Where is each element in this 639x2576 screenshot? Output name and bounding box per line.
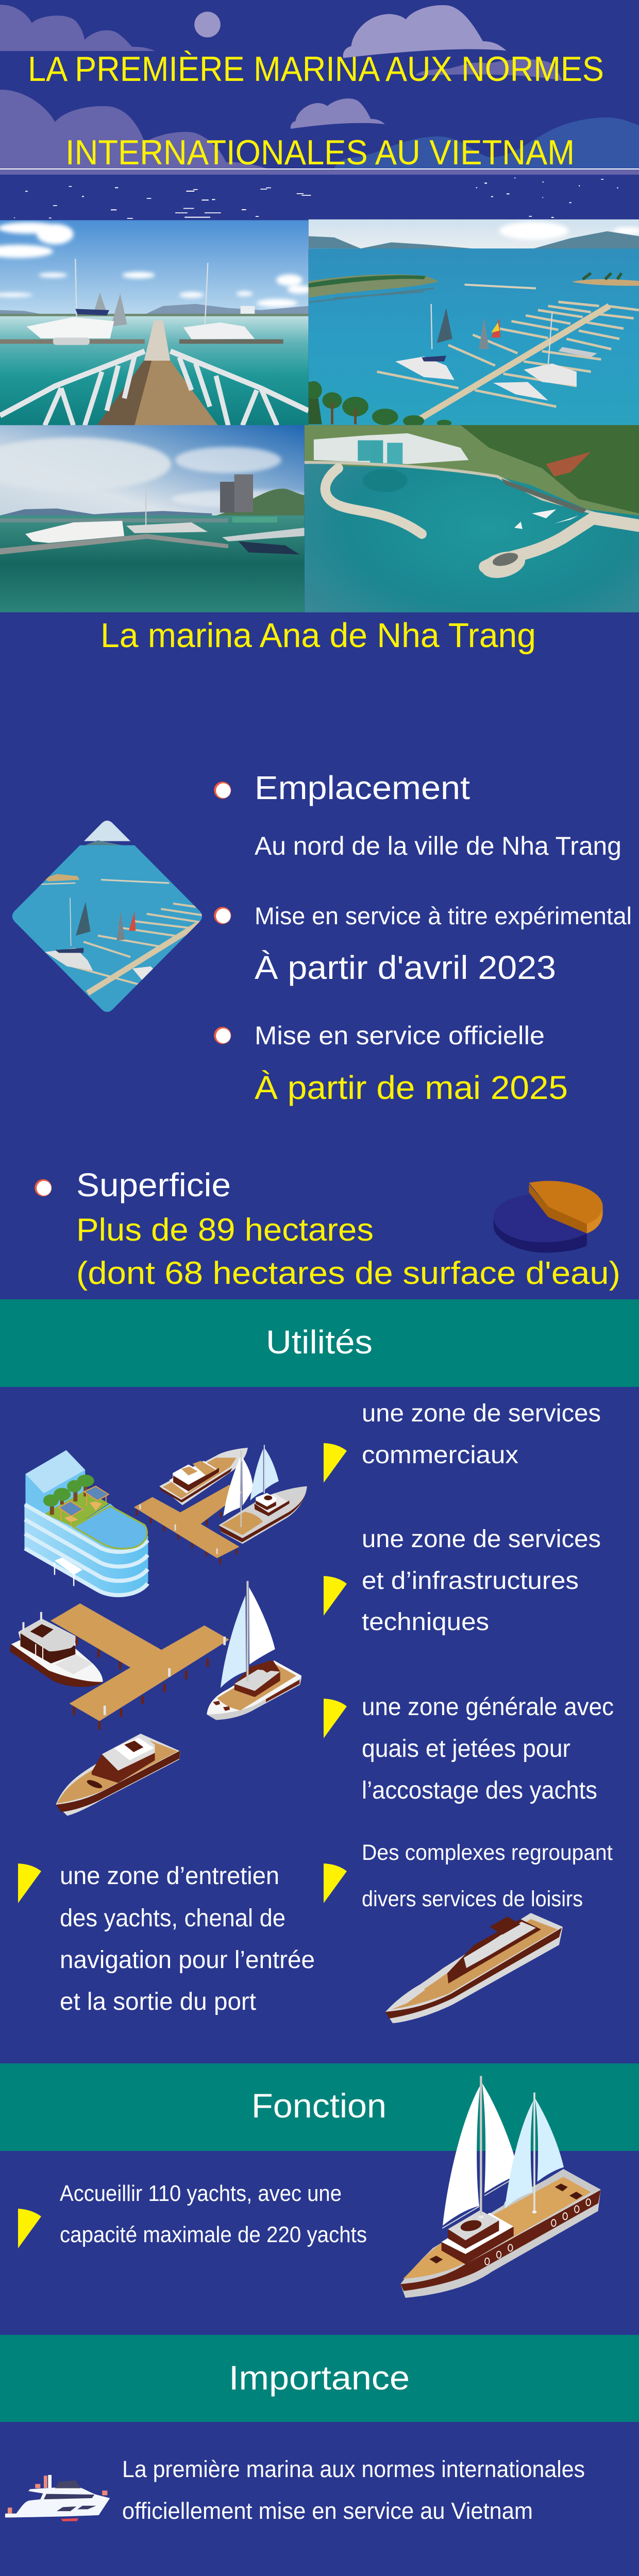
text: superficie: Plus de 89 hectares [76,1212,374,1248]
panel: key dates [8,782,603,1252]
text: fonction: capacité maximale de 220 yachts [60,2222,367,2247]
hill: right [334,117,639,168]
markers: yellow wedges [18,1443,347,2248]
cloud: middle [291,98,385,129]
text: zones de services: l’accostage des yachts [362,1777,597,1804]
text: zones de services: commerciaux [362,1442,518,1469]
title: INTERNATIONALES AU VIETNAM [65,133,575,172]
text: zone d'entretien: et la sortie du port [60,1988,256,2015]
text: zones de services: une zone générale avec [362,1693,614,1721]
text: complexes de loisirs [362,1840,613,1911]
text: superficie [76,1166,620,1291]
photo collage [0,219,639,613]
boat: left [10,1612,103,1687]
text: zones de services: quais et jetées pour [362,1735,570,1762]
text: fonction: Accueillir 110 yachts, avec une [60,2181,342,2206]
subtitle: La marina Ana de Nha Trang [100,616,536,655]
text: complexes de loisirs: Des complexes regroupant [362,1840,613,1865]
bullet: emplacement [214,782,231,799]
text: importance 1 [122,2456,585,2524]
text: zones de services: techniques [362,1608,489,1636]
photo: aerial of pontoons [306,219,639,427]
band: Utilités: Utilités [266,1324,373,1361]
moon [194,12,221,38]
text: mise en service officielle [255,1021,568,1106]
photo: aerial of breakwater [305,425,639,613]
boat: motor yacht [56,1734,180,1816]
text: zones de services: une zone de services [362,1400,601,1427]
band: Fonction [0,2063,639,2151]
text: mise en service officielle: À partir de mai 2025 [255,1069,568,1106]
bullet: essai [214,907,231,924]
text: emplacement: Emplacement [255,769,470,806]
text: mise en service officielle: Mise en service officielle [255,1021,545,1050]
band: Importance: Importance [229,2359,410,2397]
bullet: officielle [214,1027,231,1044]
text: importance 1: La première marina aux normes internationales [122,2456,585,2482]
sailboat: upper [219,1445,307,1544]
title [28,49,604,172]
text: emplacement: Au nord de la ville de Nha Trang [255,832,621,860]
text: emplacement [255,769,621,860]
text: complexes de loisirs: divers services de loisirs [362,1887,583,1911]
yacht: upper [159,1448,248,1505]
cloud: top right [343,5,507,58]
band: Fonction: Fonction [251,2087,386,2125]
cloud: lower left [0,90,267,168]
text: zone d'entretien: navigation pour l’entrée [60,1946,315,1974]
header: clouds and moon [0,5,639,219]
illustration: two-mast sailboat [400,2076,601,2298]
text: superficie: Superficie [76,1166,231,1204]
text: mise en service expérimentale: Mise en service à titre expérimental [255,902,632,929]
photo: marina with tower [0,425,318,613]
pie chart [494,1181,603,1252]
horizon line [0,168,639,170]
cloud: faint behind title [416,59,562,81]
dock: upper [134,1485,243,1564]
yacht: long [385,1913,563,2023]
text: mise en service expérimentale: À partir d'avril 2023 [255,949,556,986]
text: importance 1: officiellement mise en service au Vietnam [122,2498,533,2524]
text: zones de services [362,1400,614,1804]
cloud: top left [0,5,155,51]
text: mise en service expérimentale [255,902,632,986]
boat: right [207,1581,301,1720]
title: LA PREMIÈRE MARINA AUX NORMES [28,49,604,89]
text: fonction [60,2181,367,2247]
dock: lower [51,1603,229,1730]
text: superficie: (dont 68 hectares de surface d'eau) [76,1256,620,1291]
photo: boardwalk and yachts [0,220,312,426]
building [24,1450,148,1597]
icon: yacht with people [5,2475,110,2521]
text: zones de services: et d’infrastructures [362,1567,579,1595]
illustration: marina isometric [10,1445,307,1730]
band: Utilités [0,1299,639,1387]
text: zone d'entretien [60,1862,315,2015]
text: zone d'entretien: une zone d’entretien [60,1862,279,1890]
diamond photo [8,819,208,1018]
text: zones de services: une zone de services [362,1526,601,1553]
water sparkles [14,178,618,219]
bullet: superficie [35,1179,52,1196]
horizon band [0,170,639,175]
band: Importance [0,2335,639,2422]
text: zone d'entretien: des yachts, chenal de [60,1905,285,1932]
